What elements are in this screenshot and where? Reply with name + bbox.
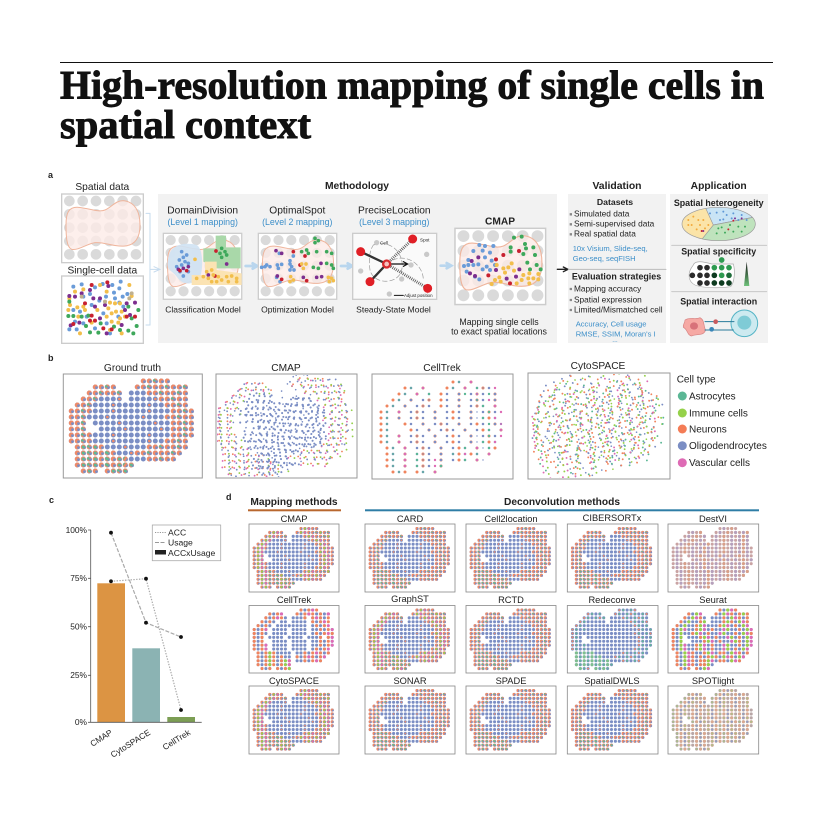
map: GraphST <box>365 594 455 673</box>
map: CARD <box>365 514 455 592</box>
text: application headings: Spatial heterogeneity <box>674 198 764 208</box>
diagrams in right half of panel a <box>441 205 767 337</box>
text: CMAP result: CMAP <box>485 216 515 227</box>
map: SONAR: SONAR <box>393 676 427 686</box>
text: validation list: 10x Visium, Slide-seq, <box>573 244 648 253</box>
level 2 mapping diagram <box>258 233 337 299</box>
chart: CytoSPACE scatter: CytoSPACE <box>571 361 626 372</box>
text: validation list: Real spatial data <box>574 229 636 239</box>
panel b <box>48 353 767 488</box>
panel d: d <box>226 492 232 502</box>
text: CMAP result <box>451 216 548 336</box>
level titles and model names: Cell <box>380 240 388 246</box>
panel: methodology background <box>158 194 557 343</box>
legend: cell type <box>677 374 767 469</box>
map: DestVI: DestVI <box>699 514 727 524</box>
CMAP result diagram <box>455 228 546 305</box>
panel c: bar and line chart: c <box>49 495 54 505</box>
text: validation list: Evaluation strategies <box>572 272 661 282</box>
bars <box>97 583 195 722</box>
label: spatial data: Spatial data <box>75 182 130 193</box>
map: CMAP <box>249 514 339 592</box>
chart: ground truth <box>63 363 202 478</box>
text: validation list: ... <box>612 337 618 344</box>
map: Redeconve: Redeconve <box>588 595 636 605</box>
map: SPOTlight <box>668 676 759 754</box>
panel: application background <box>670 194 768 343</box>
x axis labels: CellTrek <box>161 727 193 752</box>
level titles and model names <box>165 205 433 315</box>
text: validation list: RMSE, SSIM, Moran's I <box>576 330 656 339</box>
line: ACC <box>111 579 181 710</box>
level titles and model names: (Level 2 mapping) <box>262 217 333 227</box>
heading: validation: Validation <box>592 181 642 192</box>
arrow: level 1 to level 2 <box>246 263 257 269</box>
legend: Usage <box>168 538 193 548</box>
text: validation list: Limited/Mismatched cell <box>574 305 663 315</box>
arrow: level 3 to CMAP <box>441 263 451 268</box>
y axis labels <box>66 525 88 727</box>
level 1 mapping diagram <box>163 233 242 299</box>
map: CARD: CARD <box>397 514 423 524</box>
legend: cell type: Astrocytes <box>689 392 736 402</box>
level titles and model names: DomainDivision <box>167 205 238 216</box>
level titles and model names: Steady-State Model <box>356 305 431 315</box>
legend: cell type: Vascular cells <box>689 458 750 469</box>
legend: ACC <box>168 528 186 538</box>
text: CMAP result: to exact spatial locations <box>451 326 548 336</box>
level titles and model names: PreciseLocation <box>358 205 431 216</box>
map: RCTD: RCTD <box>498 595 524 605</box>
map: Seurat: Seurat <box>699 595 727 605</box>
map: RCTD <box>466 595 556 673</box>
text: application headings: Spatial specificity <box>681 246 756 256</box>
level titles and model names: Optimization Model <box>261 305 334 315</box>
map: SPADE: SPADE <box>496 676 526 686</box>
bracket arrow to methodology <box>146 213 160 325</box>
level titles and model names: Adjust position <box>404 293 433 298</box>
map: CellTrek: CellTrek <box>277 595 311 605</box>
level titles and model names: Spot <box>420 238 430 242</box>
map: CIBERSORTx <box>567 513 658 592</box>
map: CytoSPACE: CytoSPACE <box>269 676 319 686</box>
legend: cell type: Cell type <box>677 374 716 385</box>
arrow: level 2 to level 3 <box>341 263 352 269</box>
heading: mapping methods: Mapping methods <box>250 497 338 508</box>
legend: ACCxUsage <box>168 548 216 558</box>
map: CellTrek <box>249 595 339 673</box>
heading: deconvolution methods: Deconvolution methods <box>504 497 620 508</box>
level titles and model names: Classification Model <box>165 305 241 315</box>
y axis labels: 75% <box>70 573 88 583</box>
text: validation list: Semi-supervised data <box>574 219 655 229</box>
map: SPOTlight: SPOTlight <box>692 676 735 686</box>
y axis labels: 0% <box>75 717 88 727</box>
y axis labels: 50% <box>70 622 88 632</box>
panel b: b <box>48 353 54 363</box>
legend: cell type: Oligodendrocytes <box>689 441 767 452</box>
application dividers <box>672 245 767 292</box>
map: CMAP: CMAP <box>281 514 307 524</box>
panel: validation background <box>568 194 666 343</box>
text: CMAP result: Mapping single cells <box>459 317 539 327</box>
label: single-cell data: Single-cell data <box>67 266 137 276</box>
validation divider <box>568 268 666 271</box>
x axis labels: CMAP <box>88 727 114 749</box>
text: application headings <box>674 198 764 306</box>
line: Usage <box>111 533 181 637</box>
heading: methodology: Methodology <box>325 181 389 192</box>
legend: cell type: Immune cells <box>689 408 748 420</box>
icon: spatial heterogeneity ellipse <box>682 207 756 241</box>
text: validation list: Accuracy, Cell usage <box>576 320 646 329</box>
panel d <box>226 492 759 754</box>
y axis labels: 25% <box>70 670 88 680</box>
map: SpatialDWLS: SpatialDWLS <box>584 676 640 686</box>
text: validation list: Datasets <box>597 197 633 207</box>
map: Redeconve <box>567 595 658 673</box>
chart: CytoSPACE scatter <box>528 362 670 480</box>
data points <box>109 531 183 712</box>
level titles and model names: OptimalSpot <box>269 205 325 216</box>
map: CytoSPACE <box>249 676 339 754</box>
title: spatial context <box>60 102 312 147</box>
text: validation list <box>572 197 663 344</box>
icon: spatial interaction cells <box>683 310 758 337</box>
heading: application: Application <box>691 181 747 192</box>
map: CIBERSORTx: CIBERSORTx <box>583 513 642 523</box>
text: validation list: Geo-seq, seqFISH <box>573 254 636 263</box>
panel c: bar and line chart <box>49 495 221 760</box>
title <box>60 62 773 147</box>
dataset bullets <box>570 214 572 310</box>
icon: spatial specificity dots <box>689 260 749 288</box>
y axis labels: 100% <box>66 525 88 535</box>
level titles and model names: (Level 3 mapping) <box>359 217 430 227</box>
arrow: CMAP to validation <box>557 267 568 272</box>
single-cell data frame <box>62 276 143 343</box>
level 3 mapping diagram <box>353 233 437 299</box>
map: Cell2location <box>466 514 556 592</box>
spatial data frame <box>62 194 143 263</box>
text: application headings: Spatial interaction <box>680 296 757 306</box>
diagrams in left half of panel a <box>62 194 437 343</box>
legend: cell type: Neurons <box>689 424 727 436</box>
text: validation list: Mapping accuracy <box>574 284 642 294</box>
map: SONAR <box>365 676 455 754</box>
panel a: a <box>48 170 54 180</box>
text: validation list: Simulated data <box>574 209 630 219</box>
map: Cell2location: Cell2location <box>484 514 538 524</box>
axes <box>88 530 202 722</box>
map: SPADE <box>466 676 556 754</box>
map: Seurat <box>668 595 759 673</box>
title: High-resolution mapping of single cells in <box>60 62 764 108</box>
x axis labels <box>88 727 193 760</box>
chart: CMAP scatter <box>215 363 357 483</box>
chart: ground truth: Ground truth <box>104 363 161 374</box>
map: DestVI <box>668 514 759 592</box>
legend <box>152 525 221 561</box>
chart: CMAP scatter: CMAP <box>271 363 301 374</box>
map: GraphST: GraphST <box>391 594 429 604</box>
chart: CellTrek scatter <box>372 363 513 479</box>
x axis labels: CytoSPACE <box>109 727 152 760</box>
level titles and model names: (Level 1 mapping) <box>167 217 238 227</box>
map: SpatialDWLS <box>567 676 658 754</box>
chart: CellTrek scatter: CellTrek <box>423 363 462 374</box>
panel a <box>48 170 768 344</box>
text: validation list: Spatial expression <box>574 295 642 305</box>
